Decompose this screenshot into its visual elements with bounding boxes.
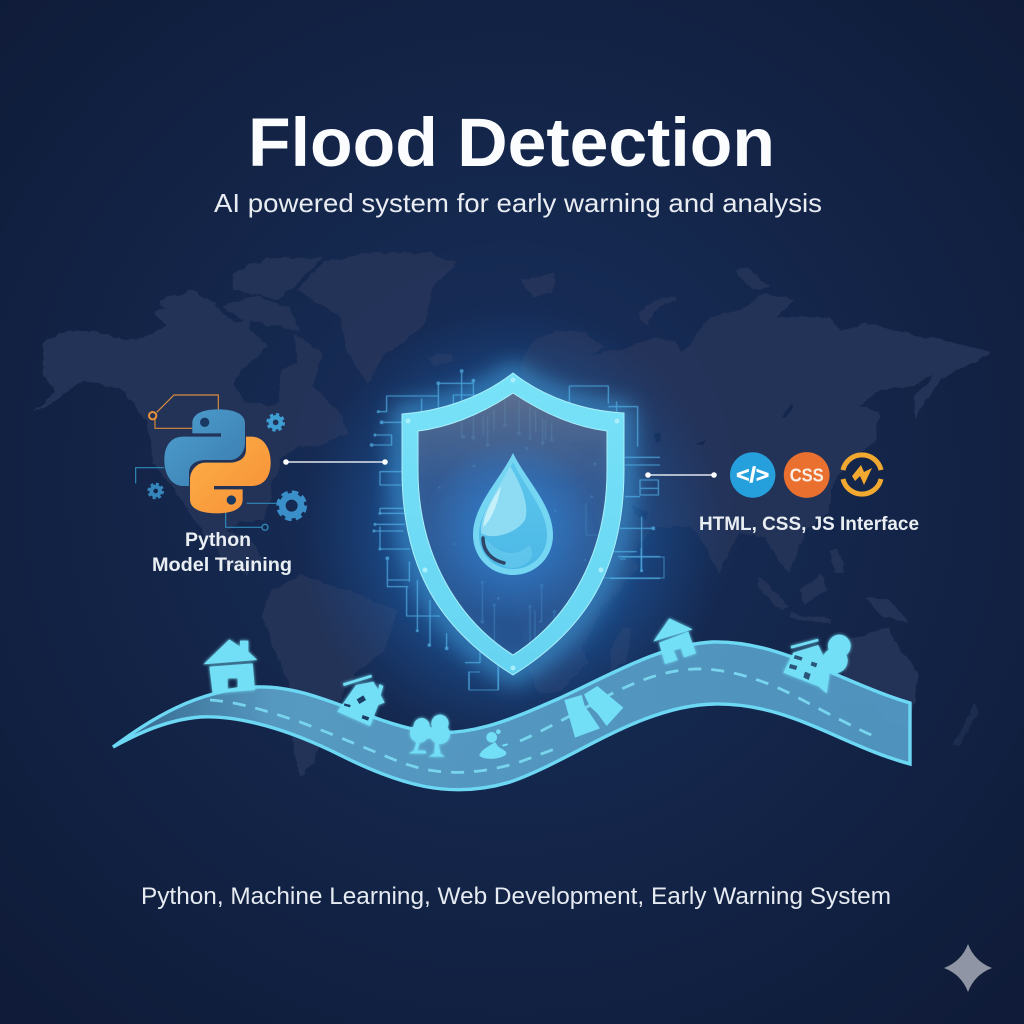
shield inner glow [423, 440, 603, 620]
icon: house and tree [783, 635, 851, 693]
flood road [113, 642, 910, 790]
lower right circuit [469, 548, 664, 690]
gear: small top [268, 414, 284, 430]
connector: shield to web stack [645, 472, 717, 478]
icon: house with lifted roof [653, 618, 696, 664]
shield rim [402, 373, 624, 675]
title: Flood Detection [248, 104, 775, 181]
footer keywords: Python, Machine Learning, Web Development, Early Warning System [141, 883, 891, 910]
icon: house upright [203, 639, 257, 693]
shield inner panel [418, 393, 607, 655]
circuit lines [370, 369, 660, 690]
shield rivets [406, 378, 620, 670]
python eyes [200, 418, 236, 505]
icon: html tag [730, 452, 775, 498]
gear: small bottom [149, 484, 163, 498]
icon: css badge [784, 452, 830, 498]
road surface [113, 642, 910, 790]
icon: water drop [473, 453, 553, 575]
python label [152, 530, 292, 576]
world map [32, 253, 992, 777]
web stack label: HTML, CSS, JS Interface [699, 514, 919, 535]
shield outer glow [402, 373, 624, 675]
connector: python to shield [283, 459, 388, 465]
icon: css badge: CSS [790, 466, 824, 486]
icon: cracked road [564, 686, 623, 738]
python label: Python [185, 530, 251, 551]
python snake: blue [164, 409, 245, 486]
icon: js lightning ring [843, 455, 881, 494]
python label: Model Training [152, 555, 292, 576]
icon: flooded tree mound [479, 729, 508, 759]
road lane dashes [210, 669, 880, 772]
icon: python logo [136, 395, 305, 530]
python snake: orange [190, 437, 271, 513]
gear: large [278, 492, 305, 519]
map inland water [470, 403, 793, 535]
shield [402, 373, 624, 675]
shield halo [298, 305, 728, 755]
icon: trees [408, 715, 450, 757]
python circuit traces [136, 395, 277, 530]
icon: html tag: </> [736, 464, 769, 487]
icon: sparkle watermark [944, 944, 992, 992]
icon: tilted house [337, 676, 385, 726]
subtitle: AI powered system for early warning and analysis [214, 188, 822, 218]
